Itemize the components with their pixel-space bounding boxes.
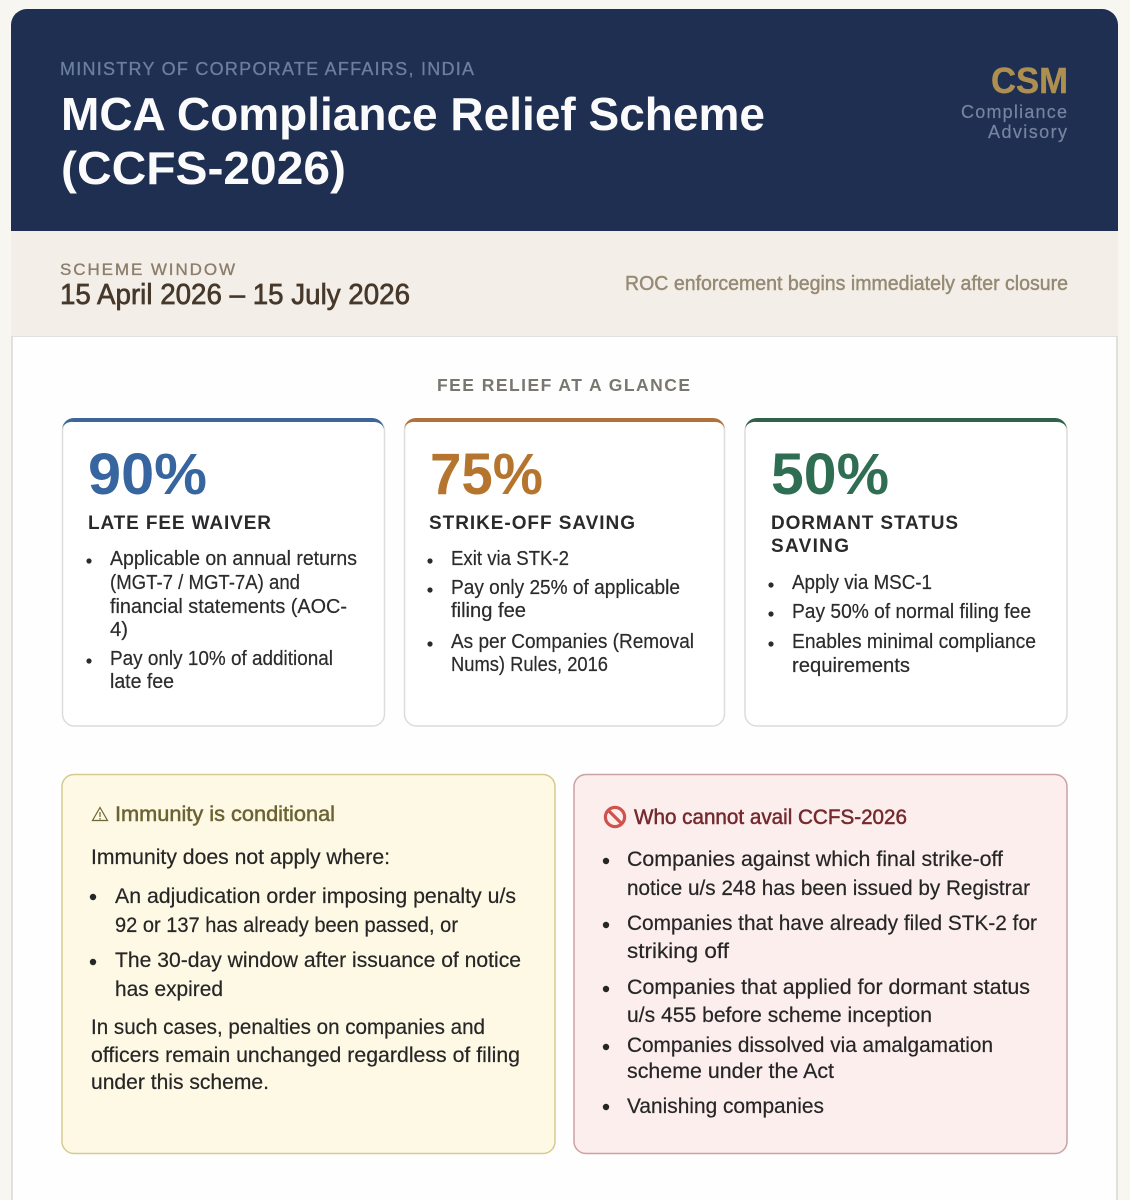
bullet list: [768, 572, 1036, 677]
panel background: [62, 774, 555, 1154]
card accent: [404, 418, 725, 430]
bullet list: has expired: [115, 978, 223, 1001]
bullet list: requirements: [792, 655, 910, 677]
title: [61, 88, 765, 194]
card: late fee waiver: [62, 418, 384, 726]
enforcement note: ROC enforcement begins immediately after closure: [625, 273, 1068, 295]
percentage: 75%: [430, 442, 543, 507]
bullet list: notice u/s 248 has been issued by Registrar: [627, 877, 1030, 900]
card: strike-off saving: [404, 418, 725, 726]
closing note: officers remain unchanged regardless of filing: [91, 1044, 520, 1067]
bullet list: late fee: [110, 671, 174, 693]
scheme window bar: [11, 231, 1118, 336]
percentage: 90%: [88, 442, 207, 507]
main white panel: [12, 336, 1117, 1200]
scheme dates: 15 April 2026 – 15 July 2026: [60, 279, 410, 311]
closing note: under this scheme.: [91, 1071, 269, 1094]
brand tagline: [961, 102, 1067, 142]
brand name: CSM: [991, 60, 1068, 101]
bullet list: [603, 848, 1037, 1118]
panel heading: Immunity is conditional: [115, 803, 335, 826]
header banner: [11, 9, 1118, 231]
title: MCA Compliance Relief Scheme: [61, 88, 765, 140]
title: (CCFS-2026): [61, 142, 346, 194]
card label: [771, 513, 958, 557]
panel: who cannot avail: [574, 774, 1067, 1154]
bullet list: Companies dissolved via amalgamation: [627, 1034, 993, 1057]
eyebrow: MINISTRY OF CORPORATE AFFAIRS, INDIA: [60, 59, 474, 79]
icon: prohibited: [605, 807, 625, 827]
bullet list: Vanishing companies: [627, 1095, 824, 1118]
section heading: FEE RELIEF AT A GLANCE: [437, 375, 690, 395]
bullet list: Apply via MSC-1: [792, 572, 932, 594]
bullet list: Companies against which final strike-off: [627, 848, 1003, 871]
card body: [404, 419, 724, 726]
scheme window label: SCHEME WINDOW: [60, 260, 235, 279]
bullet list: financial statements (AOC-: [110, 596, 347, 618]
bullet list: Pay only 10% of additional: [110, 648, 333, 670]
card label: LATE FEE WAIVER: [88, 513, 271, 534]
bullet list: Enables minimal compliance: [792, 631, 1036, 653]
panel: immunity is conditional: [62, 774, 555, 1154]
brand mark: [961, 60, 1068, 142]
bullet list: Nums) Rules, 2016: [451, 654, 608, 676]
card accent: [62, 418, 384, 430]
brand tagline: Advisory: [988, 122, 1067, 142]
bullet list: As per Companies (Removal: [451, 631, 694, 653]
bullet list: filing fee: [451, 600, 526, 622]
bullet list: scheme under the Act: [627, 1060, 834, 1083]
bullet list: [86, 548, 357, 693]
percentage: 50%: [771, 442, 889, 507]
card body: [745, 419, 1067, 726]
card label: DORMANT STATUS: [771, 513, 958, 534]
bullet list: 4): [110, 619, 128, 641]
bullet list: [90, 885, 521, 1001]
bullet list: Companies that have already filed STK-2 for: [627, 912, 1037, 935]
icon: warning triangle: [92, 808, 108, 820]
card label: SAVING: [771, 536, 849, 557]
bullet list: striking off: [627, 940, 729, 963]
bullet list: Applicable on annual returns: [110, 548, 357, 570]
bullet list: An adjudication order imposing penalty u/s: [115, 885, 516, 908]
bullet list: Companies that applied for dormant status: [627, 976, 1030, 999]
card accent: [745, 418, 1067, 430]
bullet list: Pay only 25% of applicable: [451, 577, 680, 599]
banner background: [11, 9, 1118, 231]
closing note: In such cases, penalties on companies and: [91, 1016, 485, 1039]
bullet list: [427, 548, 694, 676]
bullet list: The 30-day window after issuance of notice: [115, 949, 521, 972]
card body: [62, 419, 384, 726]
closing note: [91, 1016, 520, 1094]
card label: STRIKE-OFF SAVING: [429, 513, 635, 534]
bullet list: 92 or 137 has already been passed, or: [115, 914, 458, 937]
panel heading: Who cannot avail CCFS-2026: [634, 806, 907, 829]
intro line: Immunity does not apply where:: [91, 846, 390, 869]
bullet list: u/s 455 before scheme inception: [627, 1004, 932, 1027]
bullet list: Exit via STK-2: [451, 548, 569, 570]
brand tagline: Compliance: [961, 102, 1067, 122]
panel background: [574, 774, 1067, 1154]
bullet list: Pay 50% of normal filing fee: [792, 601, 1031, 623]
bullet list: (MGT-7 / MGT-7A) and: [110, 572, 300, 594]
card: dormant status saving: [745, 418, 1067, 726]
bar background: [11, 231, 1118, 336]
